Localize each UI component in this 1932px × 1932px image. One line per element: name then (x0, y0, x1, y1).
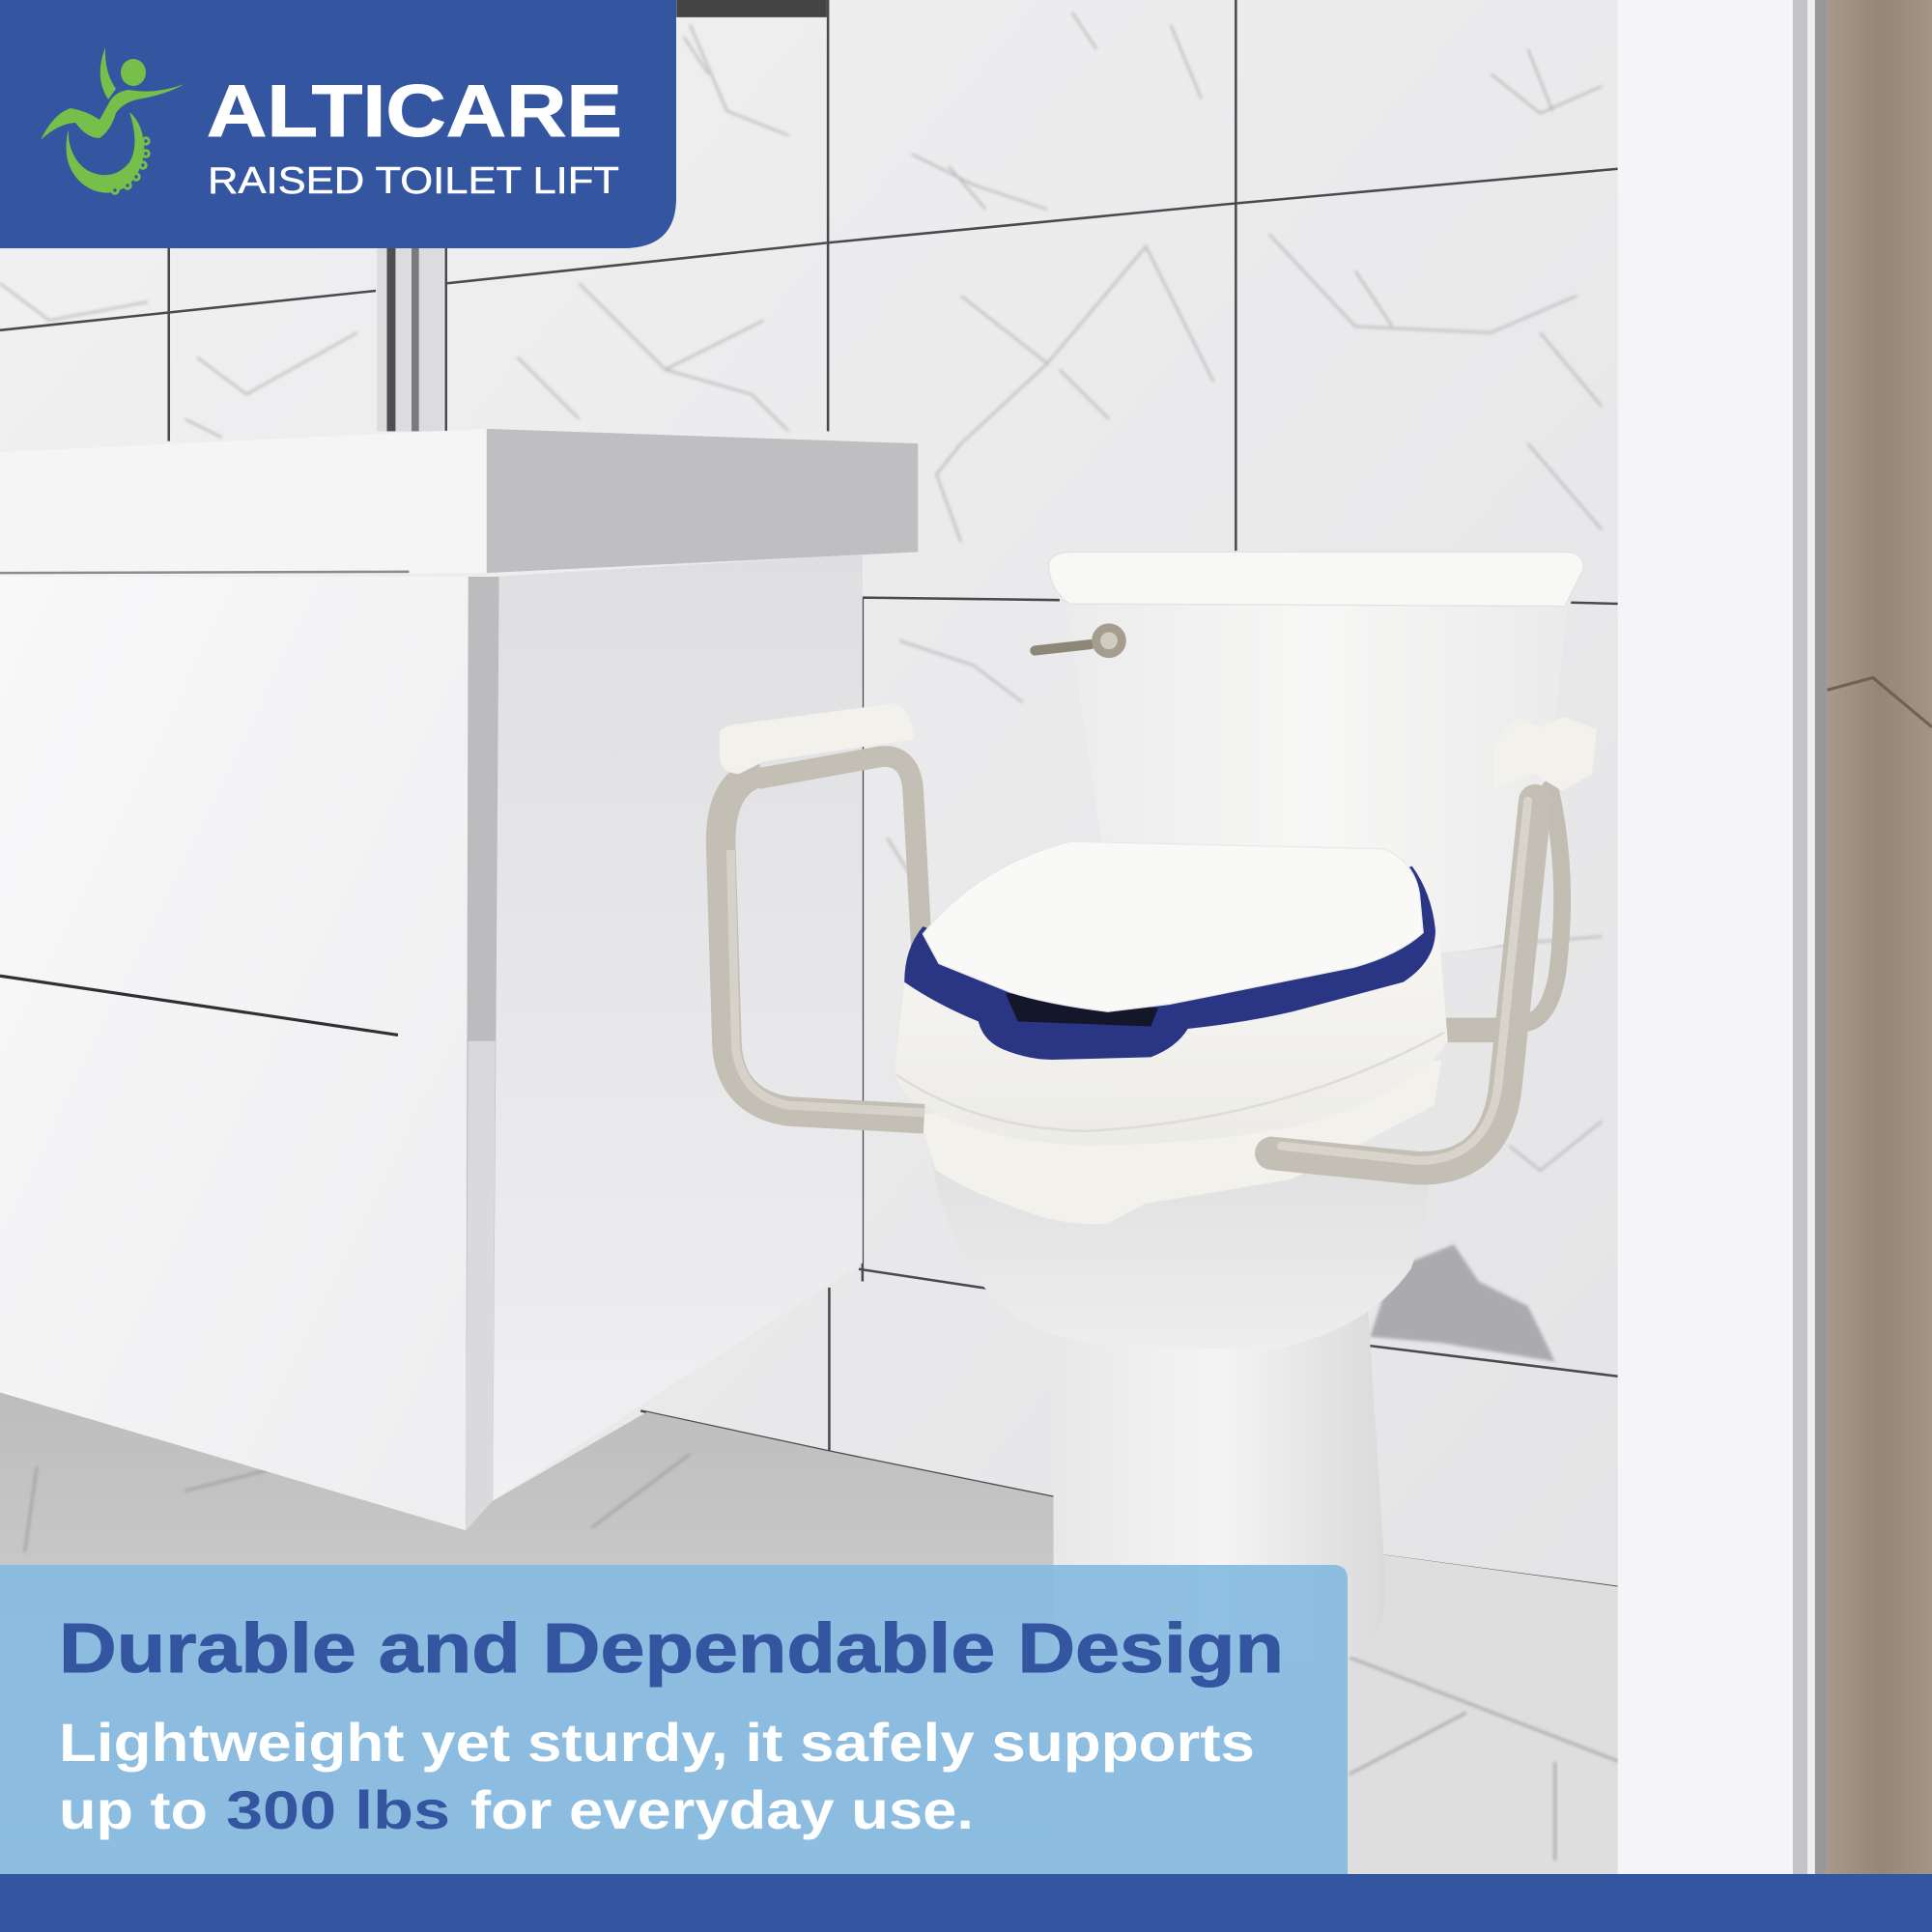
faucet (377, 246, 443, 431)
footer band (0, 1874, 1932, 1932)
logo: wheel beads (112, 138, 149, 193)
product name: RAISED TOILET LIFT (208, 160, 619, 202)
back bracket (1441, 1018, 1498, 1042)
white lid (923, 841, 1423, 1011)
logo: Alticare figure in wheelchair (41, 47, 185, 193)
right arm pad (1493, 717, 1597, 791)
header panel (0, 0, 676, 248)
callout body text: Lightweight yet sturdy, it safely supports (59, 1712, 1255, 1773)
callout heading: Durable and Dependable Design (59, 1610, 1284, 1688)
bowl (931, 1158, 1430, 1350)
flush handle (1035, 623, 1126, 658)
callout body text: for everyday use. (470, 1779, 974, 1840)
tank lid (1048, 552, 1583, 607)
vanity cabinet (0, 429, 918, 1530)
strap (1417, 1054, 1493, 1146)
brand name: ALTICARE (207, 71, 622, 153)
left arm pad (720, 703, 914, 774)
left grab arm (720, 703, 924, 1119)
right arm back tube (1528, 788, 1562, 1023)
floor (0, 1392, 1620, 1879)
riser lower (920, 1060, 1441, 1224)
door frame and wood door (1618, 0, 1932, 1879)
riser upper (895, 936, 1448, 1146)
seat opening (1006, 993, 1158, 1026)
callout body text: 300 lbs (226, 1779, 450, 1840)
mirror edge (676, 0, 827, 17)
toilet (757, 552, 1583, 1658)
left arm back tube (757, 756, 923, 974)
callout panel (0, 1565, 1348, 1874)
pedestal (1054, 1306, 1386, 1658)
tank (1065, 601, 1567, 952)
blue padded rim (904, 867, 1435, 1060)
right grab arm (1271, 717, 1597, 1168)
callout body text: up to (59, 1779, 208, 1840)
callout body text (59, 1712, 1255, 1840)
